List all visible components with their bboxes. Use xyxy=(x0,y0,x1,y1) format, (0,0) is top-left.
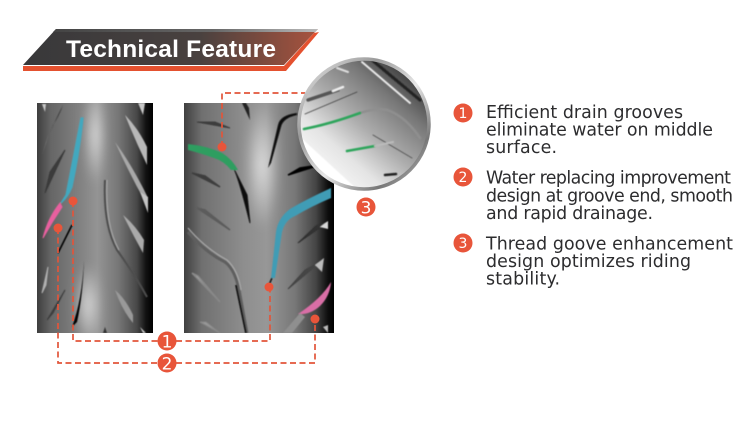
feature 1 text: eliminate water on middle xyxy=(486,120,713,140)
green groove upper xyxy=(304,113,360,129)
feature 3: 3 xyxy=(459,236,467,252)
feature 2 text: design at groove end, smooth xyxy=(486,186,733,206)
badge 3 xyxy=(356,198,376,218)
cyan drain groove xyxy=(61,118,83,203)
feature 2: 2 xyxy=(459,170,467,186)
badge 2: 2 xyxy=(162,354,172,374)
feature 2 xyxy=(454,168,733,224)
magnifier ring xyxy=(299,59,429,189)
feature 1 xyxy=(454,103,713,158)
badge 3: 3 xyxy=(361,198,371,218)
magnifier inset xyxy=(298,59,429,192)
pink groove end xyxy=(43,203,62,238)
pink groove end xyxy=(298,282,331,314)
left tire xyxy=(37,103,153,333)
feature 3 xyxy=(454,234,733,290)
feature 1 text: surface. xyxy=(486,138,557,158)
green drain groove xyxy=(188,144,238,170)
feature 3 text: design optimizes riding xyxy=(486,252,691,272)
title banner xyxy=(23,29,319,71)
callout dots xyxy=(54,142,320,324)
title text: Technical Feature xyxy=(66,36,276,63)
badge 1: 1 xyxy=(162,332,172,352)
feature 1 text: Efficient drain grooves xyxy=(486,103,683,123)
badge 1 xyxy=(158,332,176,352)
cyan drain groove xyxy=(271,188,331,278)
leader lines xyxy=(58,93,315,363)
right tire xyxy=(184,100,334,333)
badge 2 xyxy=(158,354,176,374)
green groove lower xyxy=(347,146,375,151)
feature 2 text: and rapid drainage. xyxy=(486,204,653,224)
feature 3 text: Thread goove enhancement xyxy=(485,234,733,254)
feature 2 text: Water replacing improvement xyxy=(486,168,731,188)
feature 1: 1 xyxy=(459,106,467,122)
feature 3 text: stability. xyxy=(486,270,560,290)
